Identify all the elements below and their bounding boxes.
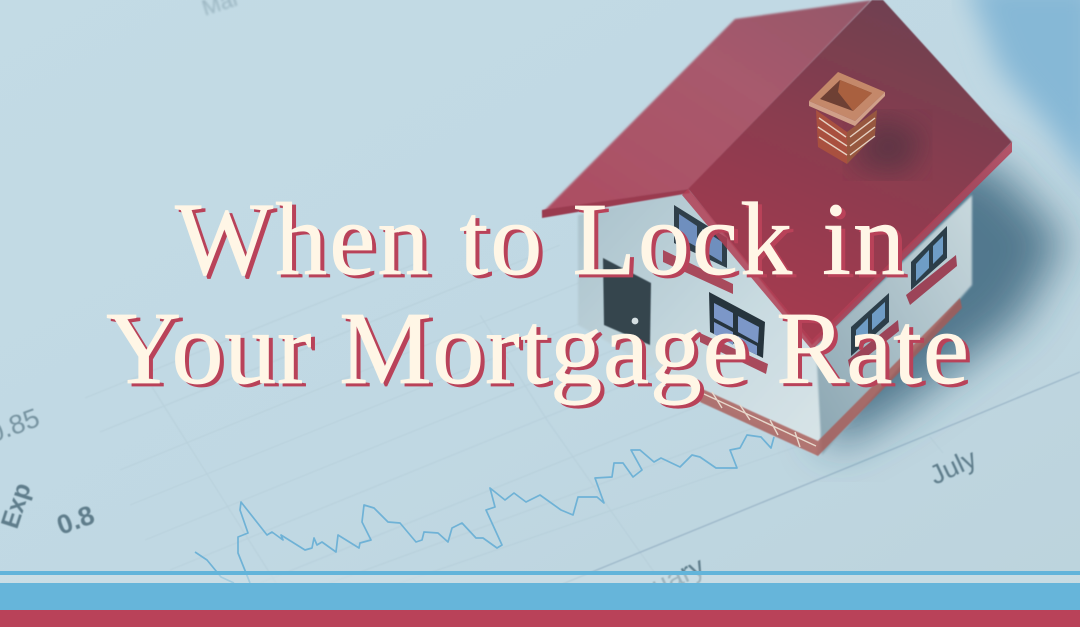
chart blue data line, main trace — [238, 435, 774, 583]
side wall — [816, 195, 972, 455]
axis label: 0.8: 0.8 — [53, 500, 98, 541]
wide blue band — [0, 583, 1080, 610]
title line 1: When to Lock in — [175, 182, 905, 297]
axis label: January: uary — [646, 550, 709, 601]
crimson band — [0, 610, 1080, 627]
thin blue stripe — [0, 571, 1080, 575]
chart grid lines — [85, 245, 943, 583]
chimney shadow — [850, 115, 925, 175]
chart blue data line, left fragment — [195, 552, 234, 583]
chimney — [809, 72, 885, 164]
brick base — [700, 298, 962, 456]
footer stripes — [0, 571, 1080, 627]
house model — [542, 0, 1012, 456]
roof left slope — [542, 0, 872, 213]
pale translucent stripe — [0, 575, 1080, 583]
roof right slope — [688, 0, 1012, 345]
right upper window — [906, 226, 957, 305]
door — [603, 258, 651, 345]
upper front window — [663, 205, 733, 294]
chart axis line — [560, 372, 1080, 585]
title line 2: Your Mortgage Rate — [106, 291, 969, 406]
front wall — [578, 190, 822, 455]
lower front window — [700, 292, 768, 374]
title — [106, 182, 969, 406]
right lower window — [848, 293, 899, 370]
blue backdrop patch, top right — [965, 0, 1080, 200]
house shadow — [800, 130, 1065, 450]
axis label: July: July — [925, 443, 982, 490]
